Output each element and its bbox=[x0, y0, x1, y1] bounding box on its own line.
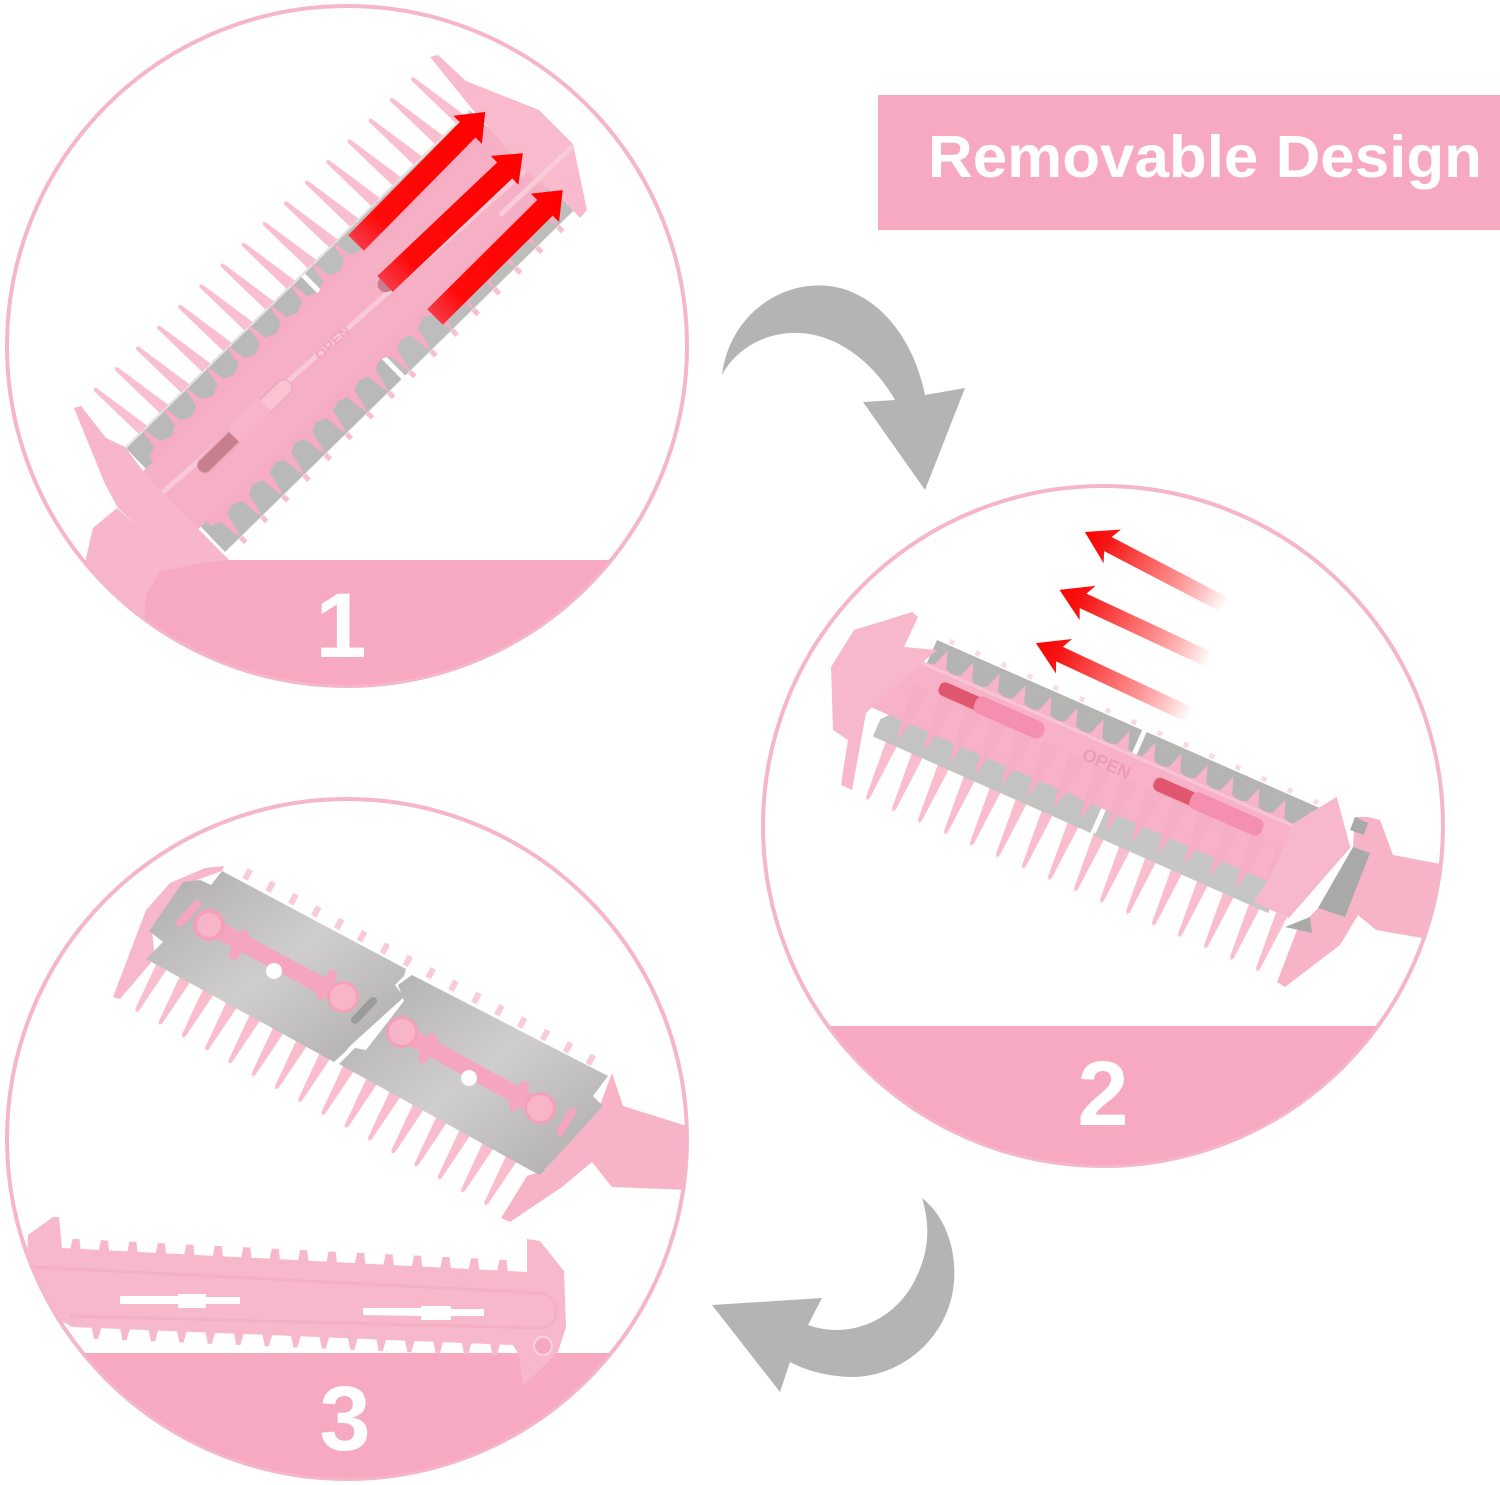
right blade mounting slot bbox=[386, 1016, 572, 1132]
comb step 1 bbox=[62, 44, 594, 630]
lock slot left bbox=[197, 380, 292, 474]
left blade mounting slot bbox=[180, 904, 359, 1013]
curved arrow: step 2 to step 3 bbox=[712, 1198, 954, 1392]
number 3: 3 bbox=[319, 1368, 371, 1470]
step 3 number band bbox=[84, 1353, 610, 1478]
open label: OPEN bbox=[1079, 744, 1134, 783]
lock slot right bbox=[378, 278, 391, 292]
step 1 number band bbox=[84, 560, 610, 685]
title text: Removable Design bbox=[928, 124, 1482, 190]
curved arrow: step 1 to step 2 bbox=[722, 285, 965, 490]
comb open label: OPEN bbox=[312, 323, 354, 364]
number 1: 1 bbox=[315, 575, 367, 677]
number 2: 2 bbox=[1077, 1043, 1129, 1145]
panel: step 2 bbox=[760, 486, 1460, 1171]
panel: step 1 bbox=[0, 6, 700, 690]
removed blade holder bbox=[25, 1217, 566, 1386]
comb with blades step 3 bbox=[113, 866, 690, 1222]
comb step 2 bbox=[812, 600, 1445, 987]
right blade bbox=[339, 975, 608, 1175]
red arrows step 2 bbox=[1028, 515, 1234, 732]
title banner bbox=[878, 95, 1500, 230]
lock slot right bbox=[1153, 778, 1264, 836]
step 2 number band bbox=[830, 1026, 1376, 1165]
blade connector bbox=[355, 1001, 373, 1020]
red arrows step 1 bbox=[342, 98, 577, 331]
lock slot left bbox=[938, 682, 1046, 738]
left blade bbox=[146, 871, 406, 1062]
panel: step 3 bbox=[0, 799, 700, 1483]
